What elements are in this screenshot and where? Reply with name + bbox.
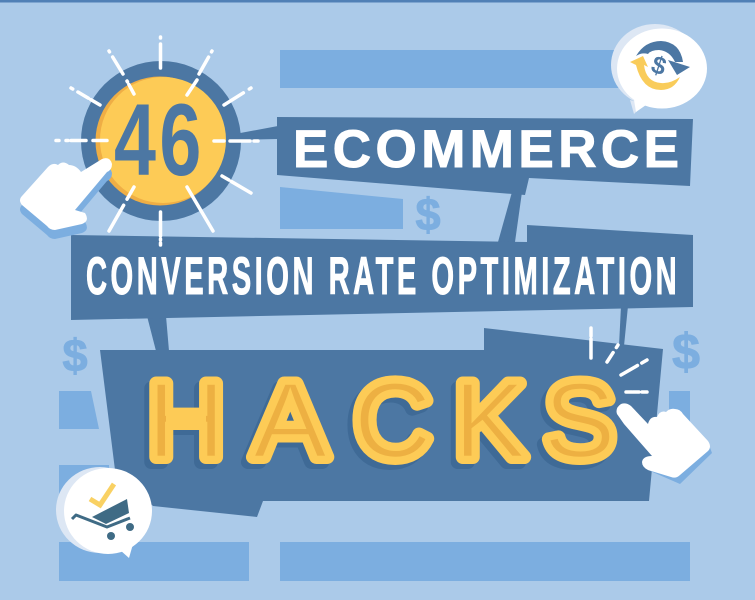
background bars (59, 50, 690, 581)
heading: hacks: H (142, 365, 220, 485)
icon: cart (72, 499, 134, 540)
connectors between banners (147, 126, 628, 351)
dollar signs: $ (415, 189, 441, 240)
bubble: refresh money icon (611, 24, 707, 114)
heading: hacks: S (539, 365, 610, 485)
icon: dollar: $ (648, 50, 670, 81)
heading: hacks (142, 360, 615, 486)
badge: 46 circle (81, 61, 241, 221)
heading: hacks: H (148, 360, 225, 480)
banner: hacks (100, 328, 663, 517)
heading: hacks: A (253, 361, 327, 481)
click rays near hand (591, 328, 647, 392)
heading: hacks: K (449, 365, 520, 485)
dollar signs: $ (62, 330, 88, 381)
icon: check mark (90, 484, 114, 505)
burst rays around badge (56, 37, 266, 245)
number 46: 46 (114, 84, 201, 198)
banner: ecommerce (277, 117, 693, 195)
heading: hacks: K (454, 360, 525, 480)
icon: pointing hand left (20, 158, 112, 239)
heading: hacks: K (454, 360, 525, 480)
icon: blue arrow (636, 41, 690, 75)
banner: conversion rate optimization (71, 225, 693, 320)
heading: hacks: H (148, 360, 225, 480)
dollar signs (62, 189, 700, 381)
bubble: shopping cart icon (56, 467, 152, 558)
heading: conversion rate optimization: CONVERSION RATE OPTIMIZATION (86, 247, 677, 306)
heading: hacks: C (354, 360, 431, 480)
icon: pointing hand right (616, 403, 712, 484)
heading: hacks: A (253, 361, 327, 481)
dollar signs: $ (672, 324, 700, 380)
heading: hacks: A (248, 366, 322, 486)
heading: hacks: S (544, 360, 615, 480)
icon: yellow arrow (630, 56, 680, 90)
heading: hacks: C (349, 365, 426, 485)
heading: hacks: C (354, 360, 431, 480)
heading: hacks: S (544, 360, 615, 480)
heading: ecommerce: ECOMMERCE (293, 120, 679, 179)
